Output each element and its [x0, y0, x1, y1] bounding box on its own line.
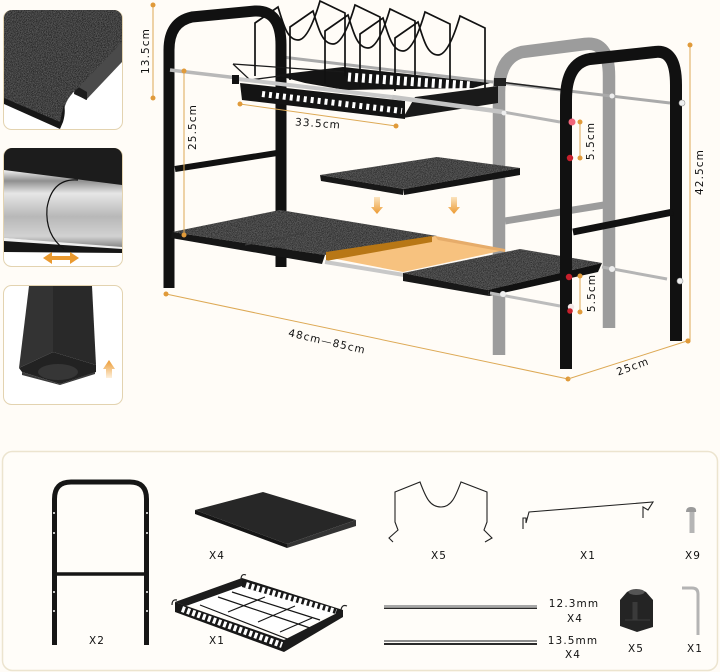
hanging basket front [232, 75, 560, 122]
part: shelf board [195, 492, 356, 548]
lower shelf: left section [171, 210, 437, 264]
rack illustration [169, 1, 685, 369]
part: rod 12.3mm [384, 605, 537, 609]
label: X5 divider: X5 [431, 550, 447, 562]
part: rod 13.5mm [384, 640, 537, 645]
front rod connectors [500, 94, 685, 314]
pan dividers [255, 1, 485, 91]
dimension: 33.5cm: 33.5cm [295, 116, 341, 132]
icon: double arrow [43, 252, 79, 264]
dimension: 33.5cm [238, 102, 398, 132]
lower shelf: orange extension [326, 236, 505, 272]
icon: down arrow left [371, 197, 383, 214]
dimension: upper 5.5cm: 5.5cm [585, 122, 597, 160]
panel: parts list [2, 452, 718, 670]
dimension: 13.5cm [140, 2, 156, 100]
label: X2: X2 [89, 635, 105, 647]
dimension: 25cm [568, 338, 690, 379]
rear frame (ghosted) [499, 44, 609, 355]
panel: telescopic tube detail [4, 148, 122, 266]
icon: down arrow right [448, 197, 460, 214]
dimension: lower 5.5cm [578, 274, 598, 314]
front upper rod [170, 70, 238, 78]
panel: anti-slip foot detail [4, 286, 122, 404]
dimension: 25cm: 25cm [615, 356, 651, 378]
part: foot cap [620, 589, 653, 632]
label: X9: X9 [685, 550, 701, 562]
label: X5 foot: X5 [628, 643, 644, 655]
rear rods [282, 57, 670, 279]
label: X1 wire: X1 [580, 550, 596, 562]
dimension: 25.5cm [182, 68, 199, 238]
dimension: 48cm-85cm: 48cm—85cm [287, 327, 367, 357]
label: 12.3mm X4: 12.3mm [549, 598, 599, 610]
lower shelf: right section [403, 249, 602, 296]
dimension: 42.5cm [686, 42, 706, 344]
label: 13.5mm X4: 13.5mm [548, 635, 598, 647]
part: hex key [682, 588, 698, 635]
label: 13.5mm X4: X4 [565, 649, 581, 661]
left frame [169, 11, 281, 288]
part: bolt [686, 507, 696, 533]
dimension: 42.5cm: 42.5cm [694, 149, 706, 195]
label: X1 basket: X1 [209, 635, 225, 647]
dimension: 48cm-85cm [164, 292, 570, 382]
part: side frame [53, 482, 148, 645]
right frame [566, 52, 676, 369]
lower telescopic rod [325, 262, 404, 275]
part: support wire [523, 502, 653, 529]
middle shelf with arrows [320, 157, 520, 195]
label: X1 key: X1 [687, 643, 703, 655]
label: 13.5mm X4 [548, 635, 598, 661]
label: 12.3mm X4: X4 [567, 613, 583, 625]
dimension: upper 5.5cm [578, 120, 597, 160]
panel: shelf surface detail [4, 10, 122, 130]
dimension: 13.5cm: 13.5cm [140, 28, 152, 74]
dimension: 25.5cm: 25.5cm [187, 104, 199, 150]
lower rods [490, 293, 560, 306]
part: basket [172, 575, 347, 652]
hanging basket back [233, 64, 490, 90]
dimension: lower 5.5cm: 5.5cm [586, 274, 598, 312]
label: 12.3mm X4 [549, 598, 599, 625]
label: X4 shelf: X4 [209, 550, 225, 562]
icon: up arrow [103, 360, 115, 378]
part: pan divider [389, 482, 492, 542]
